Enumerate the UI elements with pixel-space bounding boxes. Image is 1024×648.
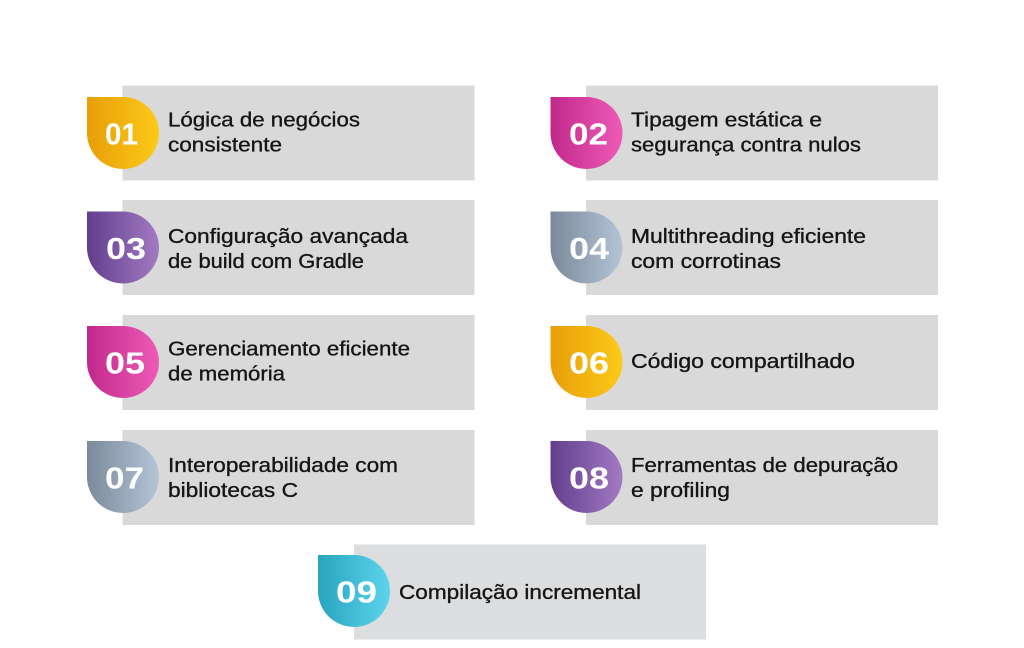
icon: badge 07 (87, 441, 159, 513)
icon: badge 08 (550, 441, 622, 513)
text: item 08: e profiling (631, 479, 730, 502)
icon: badge 03: 03 (106, 231, 146, 266)
text: item 08: Ferramentas de depuração (631, 454, 898, 477)
text: item 01 (168, 108, 360, 156)
icon: badge 05: 05 (105, 346, 145, 380)
text: item 04 (631, 225, 866, 273)
icon: badge 05 (87, 326, 159, 398)
item 07 (87, 430, 474, 525)
icon: badge 04 (550, 212, 622, 284)
text: item 08 (631, 454, 898, 502)
item 09 (318, 544, 706, 640)
text: item 02: segurança contra nulos (631, 134, 861, 156)
item 05 (87, 315, 474, 410)
text: item 02: Tipagem estática e (631, 108, 822, 132)
icon: badge 06 (550, 326, 622, 398)
icon: badge 08: 08 (569, 460, 609, 496)
icon: badge 02 (550, 97, 622, 169)
text: item 04: Multithreading eficiente (631, 225, 866, 248)
icon: badge 04: 04 (569, 231, 610, 266)
text: item 01: consistente (168, 134, 282, 156)
text: item 03 (168, 225, 409, 273)
text: item 09: Compilação incremental (399, 581, 641, 604)
text: item 07: Interoperabilidade com (168, 454, 398, 477)
text: item 06: Código compartilhado (631, 350, 855, 373)
icon: badge 09 (318, 555, 390, 627)
item 08 (550, 430, 938, 525)
icon: badge 01: 01 (105, 116, 138, 152)
text: item 05: Gerenciamento eficiente (168, 338, 410, 360)
text: item 05 (168, 338, 410, 386)
item 01 (87, 86, 474, 180)
icon: badge 07: 07 (105, 460, 144, 496)
text: item 04: com corrotinas (631, 250, 781, 273)
icon: badge 06: 06 (569, 346, 609, 380)
text: item 07 (168, 454, 398, 502)
text: item 01: Lógica de negócios (168, 108, 360, 132)
text: item 03: de build com Gradle (168, 250, 364, 273)
text: item 05: de memória (168, 362, 286, 386)
text: item 02 (631, 108, 861, 156)
text: item 07: bibliotecas C (168, 479, 298, 502)
item 06 (550, 315, 938, 410)
icon: badge 01 (87, 97, 159, 169)
item 03 (87, 200, 474, 295)
icon: badge 03 (87, 212, 159, 284)
icon: badge 09: 09 (336, 574, 377, 610)
item 02 (550, 86, 938, 180)
icon: badge 02: 02 (569, 116, 608, 152)
text: item 03: Configuração avançada (168, 225, 409, 248)
item 04 (550, 200, 938, 295)
